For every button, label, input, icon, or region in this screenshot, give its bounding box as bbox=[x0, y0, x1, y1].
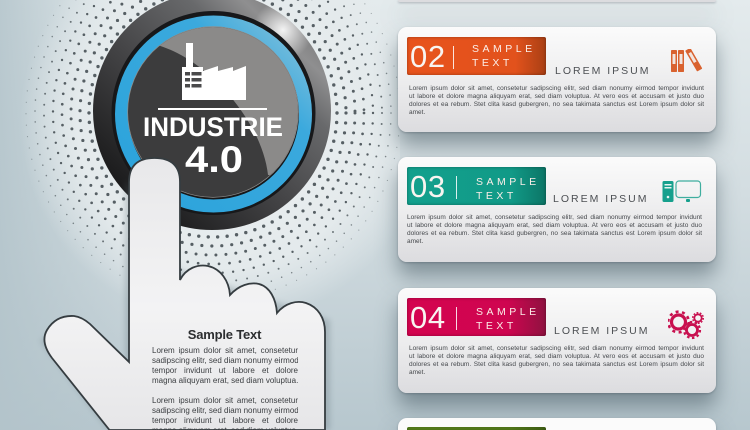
subtitle 03: LOREM IPSUM bbox=[553, 193, 649, 205]
paragraph 02: amet. bbox=[409, 109, 425, 116]
subtitle 02: LOREM IPSUM bbox=[555, 65, 651, 77]
hand pointer shadow bbox=[40, 180, 330, 430]
paragraph 02: dolores et ea rebum. Stet clita kasd gubergren, no sea takimata sanctus est Lorem ipsum dolor sit bbox=[409, 101, 704, 108]
hand paragraph two: sadipscing elitr, sed diam nonumy eirmod bbox=[152, 406, 298, 415]
header 04: SAMPLE bbox=[476, 306, 540, 318]
paragraph 02: Lorem ipsum dolor sit amet, consetetur sadipscing elitr, sed diam nonumy eirmod tempor invidunt bbox=[409, 85, 704, 92]
hand pointer bbox=[44, 158, 325, 430]
button bbox=[93, 0, 331, 230]
subtitle 04: LOREM IPSUM bbox=[554, 325, 650, 337]
header 04: TEXT bbox=[476, 320, 517, 332]
header 02: SAMPLE bbox=[472, 43, 536, 55]
paragraph 04 bbox=[409, 345, 704, 376]
paragraph 03: ut labore et dolore magna aliquyam erat, sed diam voluptua. At vero eos et accusam et justo duo bbox=[407, 222, 702, 229]
paragraph 03: Lorem ipsum dolor sit amet, consetetur sadipscing elitr, sed diam nonumy eirmod tempor invidunt bbox=[407, 214, 702, 221]
paragraph 02: ut labore et dolore magna aliquyam erat, sed diam voluptua. At vero eos et accusam et justo duo bbox=[409, 93, 704, 100]
hand paragraph one: magna aliquyam erat, sed diam voluptua. bbox=[152, 376, 298, 385]
panel: top card edge bbox=[398, 0, 716, 2]
header 02: TEXT bbox=[472, 57, 513, 69]
hand paragraph one: Lorem ipsum dolor sit amet, consetetur bbox=[152, 346, 298, 355]
panel: card 02 bbox=[398, 27, 716, 132]
header 04 bbox=[407, 298, 546, 336]
panel: card 04 bbox=[398, 288, 716, 393]
icon: factory bbox=[158, 43, 267, 110]
header 03: SAMPLE bbox=[476, 176, 540, 188]
paragraph 03 bbox=[407, 214, 702, 245]
icon: gears bbox=[668, 310, 704, 340]
header 05 bbox=[407, 427, 546, 430]
icon: computer bbox=[662, 180, 702, 202]
hand paragraph two: tempor invidunt ut labore et dolore bbox=[152, 416, 298, 425]
panel: card 05 bbox=[398, 418, 716, 430]
header 02: 02 bbox=[410, 39, 446, 74]
header 03: TEXT bbox=[476, 190, 517, 202]
paragraph 02 bbox=[409, 85, 704, 116]
icon: binders bbox=[671, 49, 702, 72]
panel: card 03 bbox=[398, 157, 716, 262]
paragraph 04: amet. bbox=[409, 369, 425, 376]
hand paragraph two bbox=[152, 396, 298, 430]
header 03 bbox=[407, 167, 546, 205]
hand paragraph two: Lorem ipsum dolor sit amet, consetetur bbox=[152, 396, 298, 405]
header 02 bbox=[407, 37, 546, 75]
button title: INDUSTRIE bbox=[143, 112, 283, 142]
header 04: 04 bbox=[410, 300, 446, 335]
paragraph 04: ut labore et dolore magna aliquyam erat, sed diam voluptua. At vero eos et accusam et justo duo bbox=[409, 353, 704, 360]
paragraph 04: dolores et ea rebum. Stet clita kasd gubergren, no sea takimata sanctus est Lorem ipsum dolor sit bbox=[409, 361, 704, 368]
paragraph 03: amet. bbox=[407, 238, 423, 245]
hand paragraph one: sadipscing elitr, sed diam nonumy eirmod bbox=[152, 356, 298, 365]
header 03: 03 bbox=[410, 169, 446, 204]
hand paragraph one: tempor invidunt ut labore et dolore bbox=[152, 366, 298, 375]
halftone dot rings bbox=[26, 0, 400, 300]
hand paragraph one bbox=[152, 346, 298, 385]
hand heading: Sample Text bbox=[188, 327, 261, 342]
paragraph 04: Lorem ipsum dolor sit amet, consetetur sadipscing elitr, sed diam nonumy eirmod tempor invidunt bbox=[409, 345, 704, 352]
paragraph 03: dolores et ea rebum. Stet clita kasd gubergren, no sea takimata sanctus est Lorem ipsum dolor sit bbox=[407, 230, 702, 237]
button version number: 4.0 bbox=[185, 139, 243, 180]
